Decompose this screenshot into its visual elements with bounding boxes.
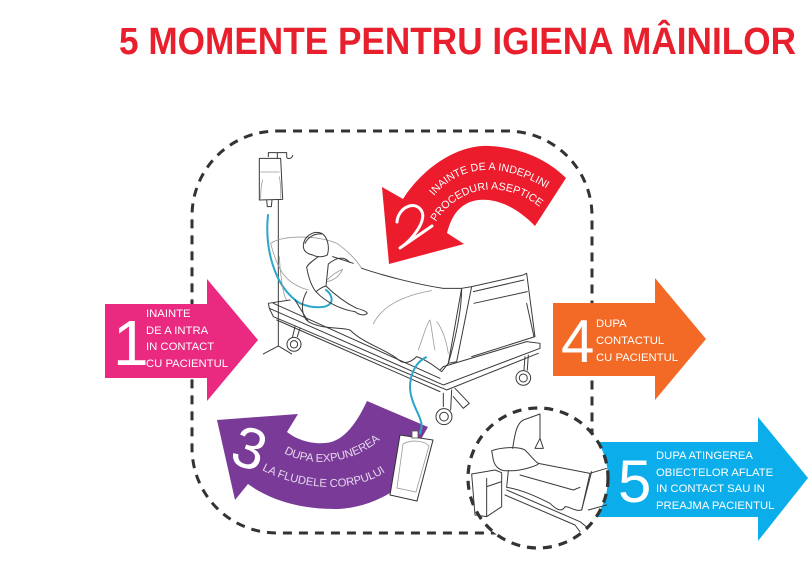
label 4: CU PACIENTUL	[596, 352, 678, 364]
arrow 3: after body fluid exposure	[217, 401, 428, 509]
label 3: DUPA EXPUNEREA	[284, 436, 380, 462]
inset circle: patient surroundings	[468, 408, 608, 548]
dashed patient zone	[192, 131, 592, 533]
footboard	[448, 273, 535, 363]
label 3	[262, 436, 384, 487]
label 2: PROCEDURI ASEPTICE	[430, 182, 544, 222]
label 5: IN CONTACT SAU IN	[656, 483, 765, 495]
drain tube	[410, 357, 426, 433]
arrow 5: after touching patient surroundings	[468, 408, 808, 548]
pillow	[271, 237, 362, 300]
patient	[303, 232, 367, 315]
label 5: PREAJMA PACIENTUL	[656, 500, 774, 512]
label 2	[429, 162, 550, 222]
label 5: OBIECTELOR AFLATE	[656, 467, 774, 479]
label 1: DE A INTRA	[146, 325, 209, 337]
label 1: INAINTE	[146, 308, 191, 320]
IV tube	[267, 215, 332, 307]
label 4: DUPA	[596, 318, 627, 330]
blanket	[302, 268, 462, 372]
IV stand and bag	[259, 153, 293, 354]
number 2	[397, 206, 432, 248]
drainage bag	[390, 431, 433, 501]
number 3: 3	[224, 413, 275, 485]
number 5: 5	[618, 448, 651, 515]
bed frame	[268, 300, 540, 392]
label 3: LA FLUDELE CORPULUI	[262, 464, 384, 487]
label 2: INAINTE DE A INDEPLINI	[429, 162, 550, 196]
arrow 4: after touching patient	[553, 278, 706, 400]
arrow 1: before touching patient	[105, 279, 258, 401]
label 5: DUPA ATINGEREA	[656, 450, 753, 462]
number 4: 4	[561, 308, 594, 375]
legs and wheels	[287, 327, 531, 425]
number 1: 1	[113, 307, 149, 379]
label 4: CONTACTUL	[596, 335, 664, 347]
illustration: patient in bed	[259, 153, 540, 433]
label 1: CU PACIENTUL	[146, 358, 228, 370]
arrow 2: before aseptic procedures	[382, 146, 566, 264]
label 1: IN CONTACT	[146, 341, 214, 353]
